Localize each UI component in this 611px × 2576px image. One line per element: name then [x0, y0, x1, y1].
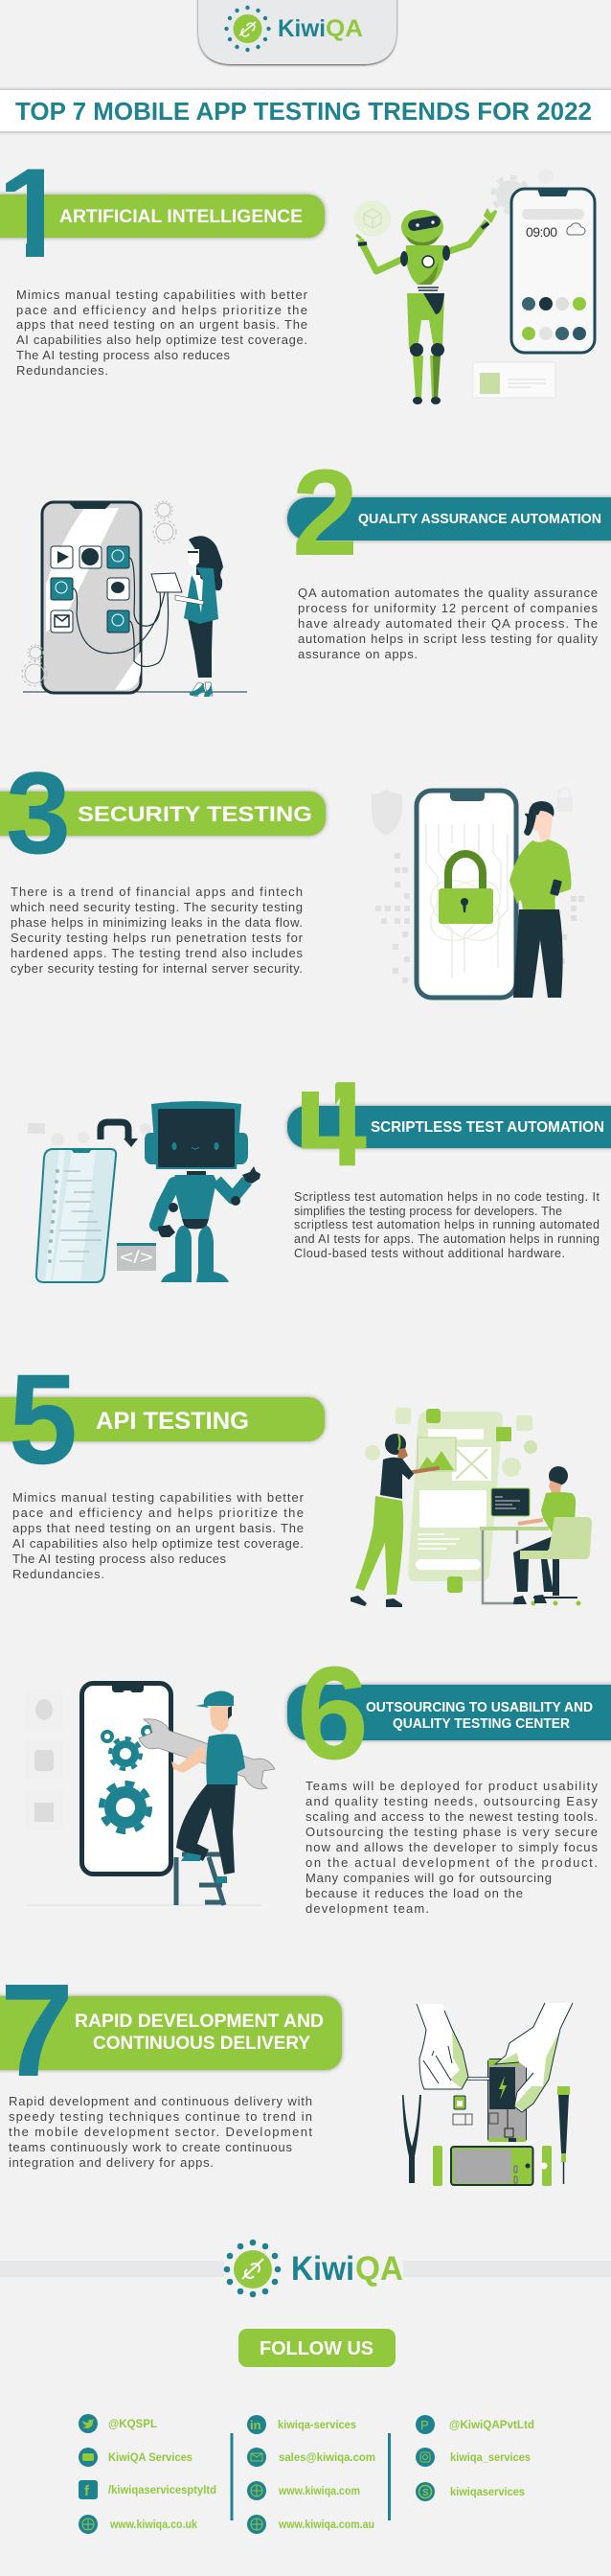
illustration: woman and developer building app: [351, 1408, 592, 1607]
title band: TOP 7 MOBILE APP TESTING TRENDS FOR 2022: [15, 99, 592, 126]
footer logo: KiwiQA: QA: [355, 2250, 403, 2288]
body text 1: Redundancies.: [16, 363, 108, 378]
illustration: robot with phone: 09:00: [526, 224, 557, 240]
body text 3: cyber security testing for internal server security.: [11, 961, 303, 976]
body text 5: apps that need testing on an urgent basis. The: [12, 1521, 304, 1535]
body text 6: Outsourcing the testing phase is very secure: [306, 1825, 598, 1839]
title band: [0, 90, 611, 131]
body text 5: [12, 1490, 305, 1581]
body text 6: and quality testing needs, outsourcing Easy: [306, 1794, 598, 1808]
body text 1: AI capabilities also help optimize test coverage.: [16, 333, 307, 347]
body text 3: which need security testing. The security testing: [10, 900, 303, 914]
social links: www.kiwiqa.com.au: [278, 2518, 374, 2531]
body text 2: automation helps in script less testing for quality: [298, 632, 598, 646]
body text 4: scriptless test automation helps in running automated: [294, 1218, 600, 1231]
body text 1: pace and efficiency and helps prioritize the: [16, 303, 307, 317]
social links: www.kiwiqa.co.uk: [109, 2518, 197, 2531]
panel: scriptless test automation: [28, 1082, 611, 1283]
body text 6: Many companies will go for outsourcing: [306, 1871, 552, 1885]
logo: KiwiQA: QA: [326, 15, 363, 42]
heading bar 2: [287, 445, 611, 582]
illustration: woman testing phone: [22, 501, 247, 697]
heading bar 4: [285, 1082, 611, 1165]
body text 3: Security testing helps run penetration tests for: [11, 931, 304, 945]
social links: kiwiqa_services: [450, 2450, 531, 2464]
body text 1: Mimics manual testing capabilities with better: [16, 288, 308, 302]
heading bar 6: QUALITY TESTING CENTER: [393, 1715, 570, 1732]
illustration: robot and phone: [28, 1101, 260, 1282]
follow us button: [238, 2329, 396, 2367]
body text 4: and AI tests for apps. The automation helps in running: [294, 1232, 600, 1246]
body text 5: pace and efficiency and helps prioritize the: [12, 1506, 304, 1520]
body text 6: because it reduces the load on the: [306, 1886, 523, 1900]
heading bar 5: 5: [9, 1348, 78, 1491]
logo: KiwiQA: Kiwi: [278, 15, 326, 42]
social links: kiwiqa-services: [278, 2418, 356, 2431]
heading bar 7: 7: [0, 1957, 74, 2104]
body text 6: scaling and access to the newest testing tools.: [306, 1809, 598, 1824]
body text 2: process for uniformity 12 percent of companies: [298, 601, 598, 615]
social links: S: [422, 2488, 429, 2498]
body text 6: on the actual development of the product.: [306, 1855, 598, 1870]
panel: outsourcing to usability and quality testing center: [24, 1640, 611, 1916]
panel: quality assurance automation: [22, 445, 611, 697]
heading bar 6: 6: [297, 1640, 369, 1787]
illustration: hands repairing phone: [402, 2003, 573, 2186]
social links: kiwiqaservices: [450, 2485, 525, 2498]
body text 2: assurance on apps.: [298, 647, 418, 661]
icon: youtube: [79, 2448, 98, 2467]
social links: P: [420, 2418, 429, 2432]
heading bar 7: CONTINUOUS DELIVERY: [93, 2034, 310, 2054]
body text 6: development team.: [306, 1901, 429, 1916]
body text 2: [298, 586, 598, 661]
heading bar 5: API TESTING: [96, 1408, 249, 1435]
body text 3: [10, 885, 304, 976]
body text 4: Scriptless test automation helps in no code testing. It: [294, 1190, 600, 1204]
body text 5: Redundancies.: [12, 1567, 104, 1581]
body text 7: Rapid development and continuous delivery with: [9, 2094, 312, 2108]
panel: security testing: [0, 748, 584, 998]
illustration: technician with wrench and phone: [24, 1683, 275, 1905]
heading bar 2: QUALITY ASSURANCE AUTOMATION: [358, 512, 601, 527]
heading bar 6: OUTSOURCING TO USABILITY AND: [366, 1699, 593, 1715]
footer logo: KiwiQA: [224, 2240, 403, 2297]
body text 4: [294, 1190, 600, 1260]
heading bar 6: [287, 1640, 611, 1787]
illustration: robot and phone: </>: [120, 1248, 153, 1267]
body text 5: Mimics manual testing capabilities with better: [12, 1490, 305, 1505]
heading bar 1: [0, 169, 328, 257]
panel: artificial intelligence: [0, 143, 595, 404]
social links: @KiwiQAPvtLtd: [449, 2418, 534, 2431]
follow us button: FOLLOW US: [260, 2338, 373, 2359]
social links: f: [84, 2483, 90, 2499]
panel: API testing: [0, 1348, 592, 1607]
body text 1: apps that need testing on an urgent basis. The: [16, 317, 307, 332]
body text 4: Cloud-based tests without additional hardware.: [294, 1247, 565, 1260]
social links: in: [250, 2418, 261, 2432]
body text 1: [16, 288, 308, 378]
social links: KiwiQA Services: [108, 2450, 192, 2464]
body text 4: simplifies the testing process for developers. The: [294, 1205, 562, 1218]
body text 3: phase helps in minimizing leaks in the data flow.: [11, 915, 303, 930]
heading bar 1: ARTIFICIAL INTELLIGENCE: [59, 206, 303, 227]
body text 7: [9, 2094, 312, 2170]
illustration: robot with phone: [354, 169, 595, 404]
body text 2: QA automation automates the quality assurance: [298, 586, 598, 600]
icon: linkedin: [247, 2415, 266, 2434]
footer logo: KiwiQA: Kiwi: [291, 2250, 354, 2288]
body text 3: hardened apps. The testing trend also includes: [11, 946, 303, 960]
icon: mail: [247, 2448, 266, 2467]
body text 7: the mobile development sector. Development: [9, 2125, 312, 2139]
heading bar 3: 3: [6, 748, 71, 878]
heading bar 4: SCRIPTLESS TEST AUTOMATION: [371, 1119, 604, 1136]
footer logo band: [0, 2240, 611, 2297]
body text 6: [306, 1779, 598, 1916]
social links: www.kiwiqa.com: [278, 2484, 360, 2497]
icon: twitter: [79, 2414, 98, 2433]
panel: rapid development and continuous delivery: [0, 1957, 573, 2186]
social links: /kiwiqaservicesptyltd: [108, 2483, 216, 2496]
heading bar 7: RAPID DEVELOPMENT AND: [75, 2012, 324, 2032]
body text 3: There is a trend of financial apps and fintech: [11, 885, 303, 899]
icon: pinterest: [416, 2415, 435, 2434]
heading bar 4: 4: [300, 1056, 367, 1191]
icon: facebook: [79, 2480, 98, 2499]
social links: sales@kiwiqa.com: [279, 2450, 375, 2464]
heading bar 2: 2: [292, 445, 358, 582]
illustration: padlock on phone with person: [372, 788, 584, 998]
body text 2: have already automated their QA process. The: [298, 616, 598, 631]
body text 7: integration and delivery for apps.: [9, 2155, 214, 2170]
body text 6: Teams will be deployed for product usability: [306, 1779, 598, 1793]
header logo tab: [198, 0, 396, 64]
body text 5: The AI testing process also reduces: [12, 1552, 226, 1566]
body text 1: The AI testing process also reduces: [16, 348, 230, 362]
icon: globe au: [247, 2515, 266, 2534]
heading bar 5: [0, 1348, 325, 1491]
icon: globe: [247, 2481, 266, 2500]
logo: KiwiQA: [224, 6, 363, 52]
body text 7: speedy testing techniques continue to trend in: [9, 2109, 312, 2124]
social links: [79, 2414, 534, 2534]
body text 5: AI capabilities also help optimize test coverage.: [12, 1536, 304, 1551]
social links: @KQSPL: [108, 2417, 157, 2430]
body text 6: now and allows the developer to simply focus: [306, 1840, 598, 1854]
icon: skype: [416, 2482, 435, 2501]
heading bar 3: [0, 748, 326, 878]
heading bar 7: [0, 1957, 342, 2104]
body text 7: teams continuously work to create continuous: [9, 2140, 293, 2154]
icon: instagram: [416, 2448, 435, 2467]
heading bar 3: SECURITY TESTING: [78, 802, 312, 826]
icon: globe uk: [79, 2515, 98, 2534]
